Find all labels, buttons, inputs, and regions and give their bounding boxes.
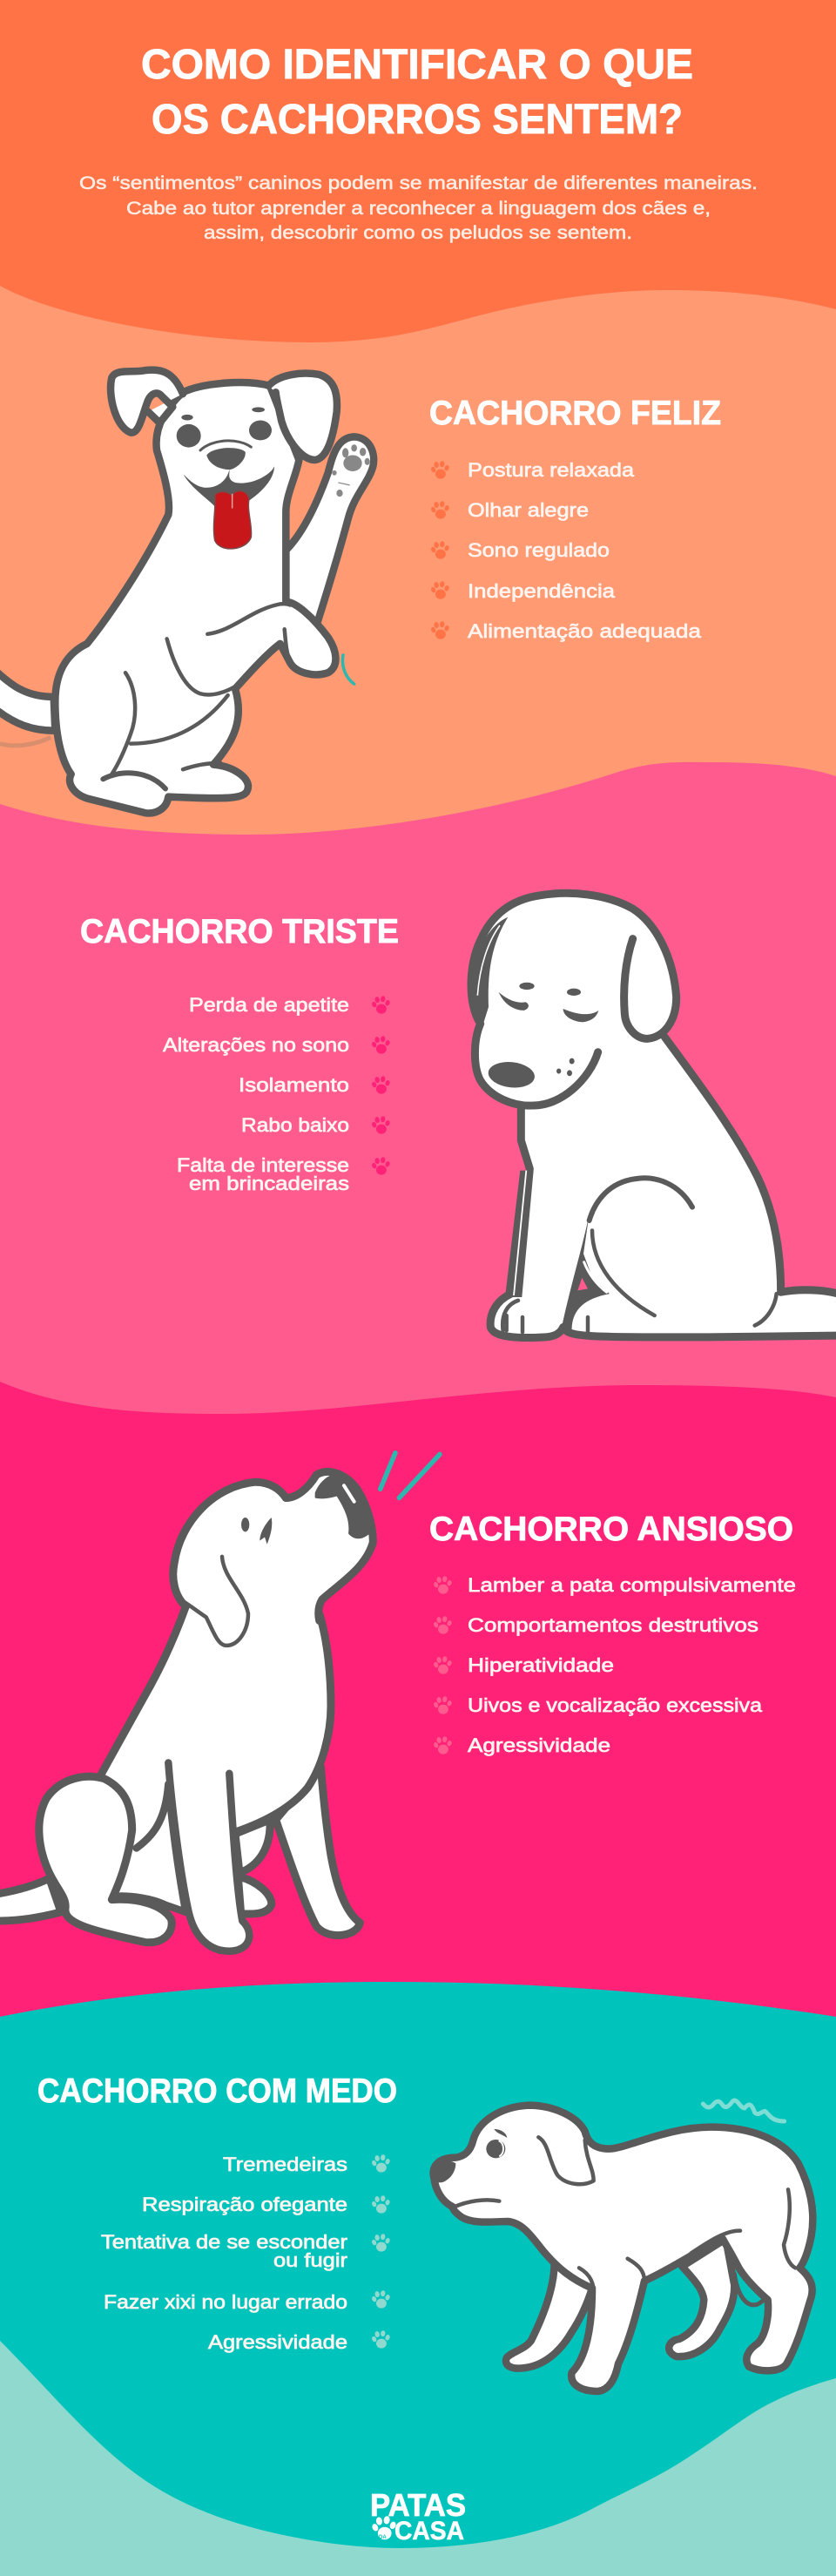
list: sad dog signs: Perda de apetite xyxy=(189,994,349,1016)
title: OS CACHORROS SENTEM? xyxy=(152,97,683,143)
intro text xyxy=(79,173,758,243)
panel: anxious dog background xyxy=(0,1382,836,2038)
list: anxious dog signs: Comportamentos destrutivos xyxy=(468,1614,758,1636)
logo: Patas da Casa: DA xyxy=(379,2535,387,2540)
list: scared dog signs: Respiração ofegante xyxy=(142,2194,347,2215)
heading: happy dog: CACHORRO FELIZ xyxy=(429,395,721,432)
list: sad dog signs: em brincadeiras xyxy=(189,1173,349,1194)
list: happy dog signs: Independência xyxy=(468,580,616,602)
list: happy dog signs xyxy=(430,459,702,642)
list: scared dog signs: Tentativa de se esconder xyxy=(101,2231,347,2253)
heading: sad dog: CACHORRO TRISTE xyxy=(80,913,399,950)
panel: sad dog background xyxy=(0,762,836,1437)
list: sad dog signs: Alterações no sono xyxy=(163,1034,349,1056)
list: sad dog signs: Falta de interesse xyxy=(177,1154,349,1176)
list: sad dog signs xyxy=(163,994,391,1194)
illustration: anxious dog xyxy=(0,1453,440,1951)
list: happy dog signs: Alimentação adequada xyxy=(468,620,702,642)
list: anxious dog signs: Uivos e vocalização excessiva xyxy=(468,1694,763,1716)
list: happy dog signs: Sono regulado xyxy=(468,539,610,561)
list: scared dog signs xyxy=(101,2153,391,2353)
intro text: Cabe ao tutor aprender a reconhecer a linguagem dos cães e, xyxy=(126,199,711,219)
intro text: assim, descobrir como os peludos se sentem. xyxy=(204,223,632,243)
illustration: scared dog xyxy=(433,2100,812,2391)
list: scared dog signs: ou fugir xyxy=(273,2249,347,2271)
list: anxious dog signs: Hiperatividade xyxy=(468,1654,614,1676)
heading: scared dog: CACHORRO COM MEDO xyxy=(37,2072,397,2110)
list: anxious dog signs xyxy=(433,1574,796,1756)
logo: Patas da Casa: CASA xyxy=(394,2517,464,2546)
list: anxious dog signs: Lamber a pata compulsivamente xyxy=(468,1574,796,1596)
panel: footer wave xyxy=(0,2341,836,2576)
list: sad dog signs: Rabo baixo xyxy=(241,1114,349,1136)
title: COMO IDENTIFICAR O QUE xyxy=(141,42,693,88)
logo: Patas da Casa xyxy=(370,2487,466,2546)
title xyxy=(141,42,693,143)
list: scared dog signs: Agressividade xyxy=(208,2331,347,2353)
illustration: sad dog xyxy=(471,893,836,1338)
list: anxious dog signs: Agressividade xyxy=(468,1734,610,1756)
intro text: Os “sentimentos” caninos podem se manifestar de diferentes maneiras. xyxy=(79,173,758,193)
list: sad dog signs: Isolamento xyxy=(239,1074,349,1096)
list: scared dog signs: Tremedeiras xyxy=(223,2153,347,2175)
panel: happy dog background xyxy=(0,286,836,871)
panel: scared dog background xyxy=(0,1982,836,2576)
illustration: happy dog xyxy=(0,370,374,813)
panel: header background xyxy=(0,0,836,366)
logo: Patas da Casa: PATAS xyxy=(370,2487,466,2523)
list: happy dog signs: Olhar alegre xyxy=(468,499,589,521)
list: happy dog signs: Postura relaxada xyxy=(468,459,635,481)
heading: anxious dog: CACHORRO ANSIOSO xyxy=(429,1511,793,1548)
list: scared dog signs: Fazer xixi no lugar errado xyxy=(104,2291,347,2313)
